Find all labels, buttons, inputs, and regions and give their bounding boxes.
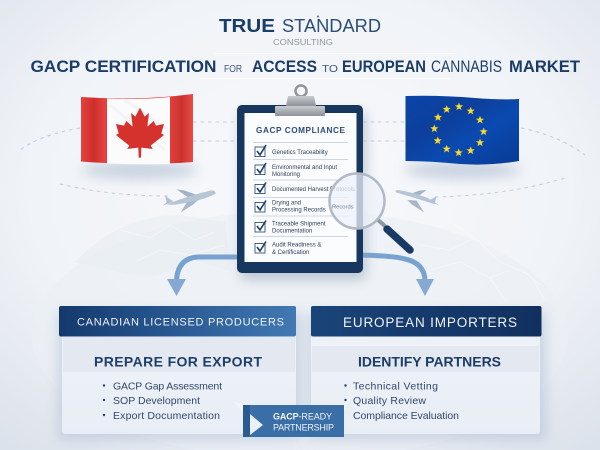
logo: True Standard Consulting: TRUE xyxy=(219,15,275,36)
subheading band xyxy=(63,337,295,372)
subheading: IDENTIFY PARTNERS xyxy=(358,354,501,370)
checklist items: Genetics Traceability xyxy=(272,150,328,156)
icon: metal clip xyxy=(275,86,325,116)
bullet list xyxy=(103,380,222,422)
badge: GACP-ready partnership: GACP-READY xyxy=(273,412,332,422)
bullet list: Quality Review xyxy=(353,395,426,407)
panel header xyxy=(59,306,296,336)
dashed trade route lines xyxy=(20,122,585,197)
panel header: EUROPEAN IMPORTERS xyxy=(343,315,517,330)
clipboard xyxy=(237,86,366,280)
icon: ring of stars xyxy=(430,102,488,156)
title: EUROPEAN xyxy=(342,57,426,76)
panel header: CANADIAN LICENSED PRODUCERS xyxy=(77,316,284,328)
title: MARKET xyxy=(509,57,581,76)
checklist items: Documented Harvest Protocols xyxy=(272,187,355,193)
bullet list: GACP Gap Assessment xyxy=(113,380,222,392)
panel: European importers xyxy=(308,306,546,440)
checklist items: Audit Readiness & xyxy=(272,242,321,248)
checklist items: Processing Records xyxy=(272,208,326,214)
logo: True Standard Consulting: STANDARD xyxy=(282,15,381,36)
checklist items: Environmental and Input xyxy=(272,165,337,171)
bullet list xyxy=(344,380,459,422)
icon: airplane right xyxy=(396,190,439,212)
panel: Canadian licensed producers xyxy=(58,306,302,440)
paper sheet xyxy=(244,113,356,262)
panel header xyxy=(311,306,542,336)
subheading: PREPARE FOR EXPORT xyxy=(94,354,262,370)
checklist items: Traceable Shipment xyxy=(272,222,326,228)
badge: GACP-ready partnership xyxy=(233,394,352,437)
checklist items: Documentation xyxy=(272,228,312,234)
row dividers and checkboxes xyxy=(253,142,348,253)
subheading band xyxy=(312,346,539,372)
logo: True Standard Consulting xyxy=(219,15,381,47)
checklist items: Drying and xyxy=(272,200,301,206)
bullet list: Export Documentation xyxy=(113,410,220,422)
icon: play triangle xyxy=(250,414,263,435)
globe with faint continents xyxy=(32,210,568,450)
title: FOR xyxy=(224,63,242,75)
flag: Canada xyxy=(81,94,198,179)
bullet list: Compliance Evaluation xyxy=(353,410,459,422)
checklist heading: GACP COMPLIANCE xyxy=(256,126,346,135)
flag: European Union xyxy=(404,96,520,179)
icon: magnifying glass xyxy=(330,174,410,250)
title: TO xyxy=(322,63,338,75)
logo: True Standard Consulting: CONSULTING xyxy=(273,38,333,47)
checklist items: & Certification xyxy=(272,250,309,256)
badge: GACP-ready partnership: PARTNERSHIP xyxy=(273,422,334,432)
icon: maple leaf xyxy=(116,108,164,158)
panel body xyxy=(62,330,296,434)
title xyxy=(30,53,581,79)
arrow: clipboard to European importers xyxy=(360,255,434,296)
icon: magnifying glass: Records xyxy=(332,204,354,210)
panel body xyxy=(311,330,540,434)
title: CANNABIS xyxy=(431,57,502,76)
clipboard board xyxy=(237,105,363,273)
checklist items xyxy=(272,150,355,256)
title: GACP CERTIFICATION xyxy=(30,57,216,76)
bullet list: SOP Development xyxy=(113,395,200,407)
title: ACCESS xyxy=(252,57,317,76)
icon: airplane left xyxy=(163,189,216,212)
bullet list: Technical Vetting xyxy=(353,380,438,392)
checklist items: Monitoring xyxy=(272,172,300,178)
arrow: clipboard to Canadian producers xyxy=(167,257,240,296)
